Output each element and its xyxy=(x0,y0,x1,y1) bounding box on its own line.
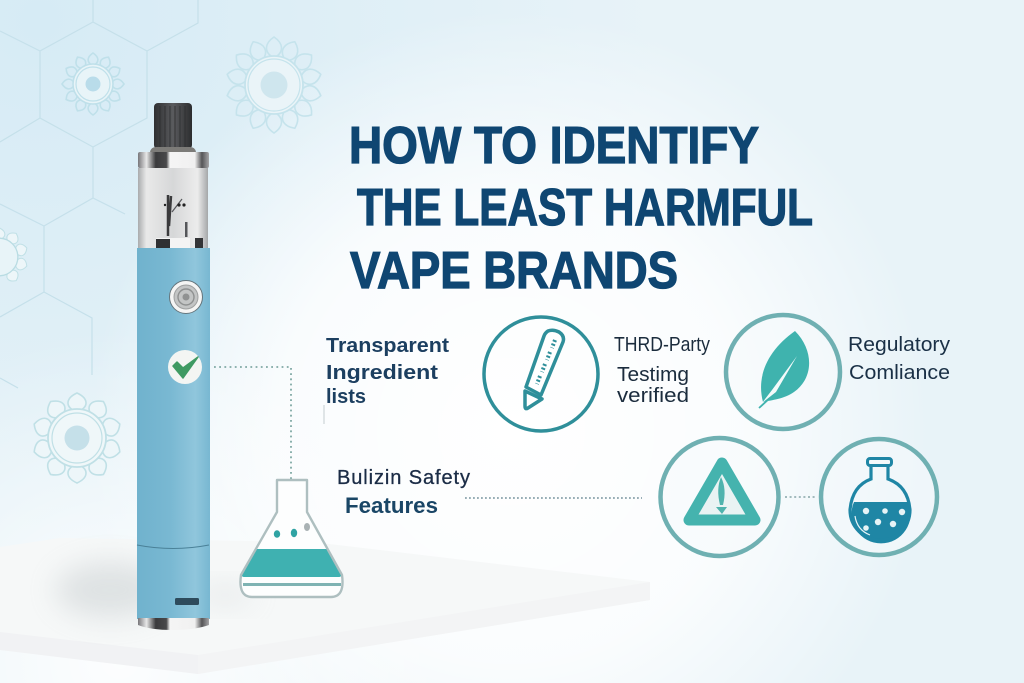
flower: lower left xyxy=(31,393,123,483)
hexagon pattern xyxy=(0,0,198,388)
title: VAPE BRANDS xyxy=(350,242,678,300)
dotted connector: pen to flask xyxy=(214,367,291,512)
flower: small top left xyxy=(62,53,124,115)
dotted connector: warning to flask xyxy=(785,496,817,498)
title: HOW TO IDENTIFY xyxy=(349,117,759,175)
flower: large top xyxy=(226,37,322,133)
metal collar xyxy=(138,152,209,168)
metal base xyxy=(138,618,209,630)
label: regulatory compliance: Comliance xyxy=(849,362,950,384)
label: third-party testing xyxy=(614,334,710,407)
label: regulatory compliance xyxy=(848,334,950,384)
pen body xyxy=(137,248,210,619)
faint tick below lists xyxy=(323,405,325,424)
vape pen xyxy=(137,103,210,630)
check badge xyxy=(168,350,202,384)
charging slot xyxy=(175,598,199,605)
title xyxy=(349,117,813,300)
fire button xyxy=(170,280,202,314)
label: third-party testing: Testimg xyxy=(617,364,689,386)
icon: leaf xyxy=(726,315,840,429)
label: transparent ingredient lists xyxy=(326,335,449,408)
label: built-in safety features xyxy=(337,467,470,518)
label: third-party testing: THRD-Party xyxy=(614,334,710,356)
label: transparent ingredient lists: lists xyxy=(326,386,366,408)
icon: round flask xyxy=(821,439,937,555)
label: transparent ingredient lists: Ingredient xyxy=(326,362,438,384)
display platform xyxy=(0,538,650,674)
label: third-party testing: verified xyxy=(617,385,689,407)
icon: test strip pen xyxy=(484,317,598,431)
flower: partial left edge xyxy=(0,228,29,284)
body seam xyxy=(137,545,209,548)
label: transparent ingredient lists: Transparent xyxy=(326,335,449,357)
label: regulatory compliance: Regulatory xyxy=(848,334,950,356)
label: built-in safety features: Features xyxy=(345,493,438,518)
pen cap xyxy=(150,103,196,152)
small flask illustration xyxy=(240,480,343,597)
label: built-in safety features: Bulizin Safety xyxy=(337,467,470,489)
glass tank xyxy=(138,168,208,248)
dotted connector: safety features to warning icon xyxy=(465,497,642,499)
title: THE LEAST HARMFUL xyxy=(357,179,813,237)
icon: warning triangle xyxy=(660,438,778,556)
